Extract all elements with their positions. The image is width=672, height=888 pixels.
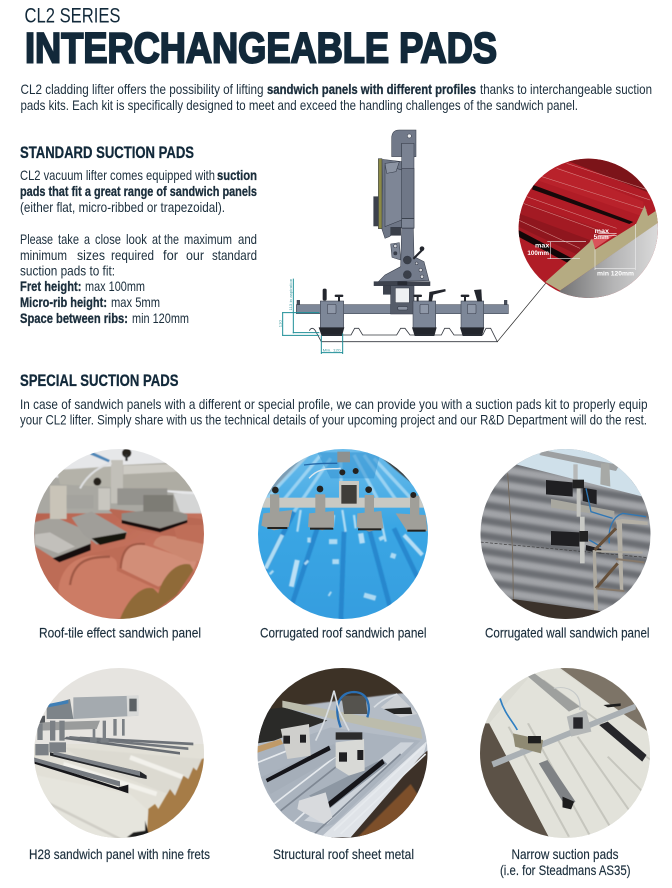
photo: structural roof sheet metal — [258, 668, 428, 838]
teal dimension lines — [282, 279, 343, 354]
dimension labels on diagram: Min. 120 — [323, 349, 341, 353]
heading: standard suction pads: STANDARD SUCTION PADS — [20, 143, 194, 162]
panel detail annotations: min 120mm — [597, 271, 634, 278]
photo: narrow suction pads — [480, 668, 650, 838]
text block: standard suction pads: (either flat, micro-ribbed or trapezoidal). — [20, 199, 225, 215]
photo: corrugated wall panel — [480, 449, 650, 619]
panel detail annotations — [527, 224, 635, 278]
panel detail annotations: max — [595, 228, 609, 235]
intro paragraph — [20, 81, 652, 113]
series label: CL2 SERIES — [24, 5, 120, 28]
text block: standard suction pads: CL2 vacuum lifter comes equipped with — [20, 167, 215, 183]
caption: narrow suction pads — [500, 846, 630, 878]
text block: standard suction pads: pads that fit a great range of sandwich panels — [20, 183, 257, 199]
caption: narrow suction pads: (i.e. for Steadmans AS35) — [500, 862, 630, 878]
caption: roof-tile: Roof-tile effect sandwich panel — [39, 625, 201, 641]
caption: corrugated roof: Corrugated roof sandwich panel — [260, 625, 426, 641]
text block: standard suction pads: at — [152, 231, 161, 247]
caption: narrow suction pads: Narrow suction pads — [512, 846, 618, 862]
caption: structural roof: Structural roof sheet metal — [273, 846, 414, 862]
text block: standard suction pads: a — [84, 231, 90, 247]
text block: standard suction pads: and — [238, 231, 257, 247]
dimension labels on diagram — [278, 279, 341, 353]
panel detail annotations: max — [535, 243, 550, 250]
photo: corrugated roof panel — [258, 449, 428, 619]
text block: standard suction pads — [20, 167, 257, 326]
text block: standard suction pads: sizes — [77, 247, 105, 263]
intro paragraph: CL2 cladding lifter offers the possibility of lifting — [20, 81, 264, 97]
text block: standard suction pads: max 100mm — [85, 278, 145, 294]
text block: standard suction pads: our — [186, 247, 204, 263]
lifter machine side view — [296, 130, 508, 328]
text block: standard suction pads: suction — [217, 167, 257, 183]
text block: standard suction pads: look — [126, 231, 148, 247]
text block: standard suction pads: Space between ribs: — [20, 310, 128, 326]
dimension labels on diagram: 110 — [278, 320, 282, 327]
text block: standard suction pads: required — [111, 247, 154, 263]
text block: standard suction pads: max 5mm — [111, 294, 160, 310]
text block: standard suction pads: take — [58, 231, 79, 247]
text block: standard suction pads: standard — [212, 247, 257, 263]
corrugated panel profile — [309, 328, 497, 342]
caption: H28: H28 sandwich panel with nine frets — [29, 846, 210, 862]
dimension labels on diagram: 113 in aspiration — [289, 279, 293, 311]
callout leader line — [497, 281, 547, 342]
photo: roof-tile effect panel — [34, 449, 204, 619]
diagram: CL2 lifter with panel detail — [278, 130, 663, 354]
text block: standard suction pads: Micro-rib height: — [20, 294, 107, 310]
text block: standard suction pads: for — [163, 247, 178, 263]
text block: standard suction pads: min 120mm — [132, 310, 189, 326]
zoomed panel detail circle — [517, 157, 663, 300]
panel detail annotations: 5mm — [594, 234, 609, 241]
panel detail annotations: 100mm — [527, 250, 549, 257]
text block: standard suction pads: the — [164, 231, 179, 247]
heading: special suction pads: SPECIAL SUCTION PADS — [20, 371, 178, 390]
text block: standard suction pads: Fret height: — [20, 278, 82, 294]
photo: H28 panel — [34, 668, 204, 838]
intro paragraph: sandwich panels with different profiles — [267, 81, 476, 97]
text block: standard suction pads: maximum — [184, 231, 232, 247]
title: INTERCHANGEABLE PADS — [25, 26, 497, 72]
text block: standard suction pads: minimum — [20, 247, 67, 263]
text block: standard suction pads: close — [95, 231, 121, 247]
text block: standard suction pads: suction pads to fit: — [20, 262, 115, 278]
text block: special suction pads — [20, 396, 648, 428]
text block: standard suction pads: Please — [20, 231, 53, 247]
